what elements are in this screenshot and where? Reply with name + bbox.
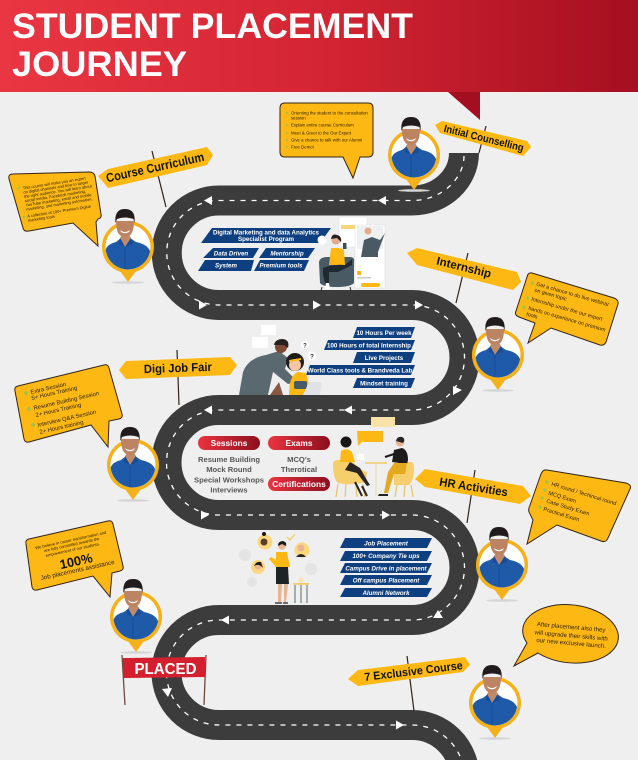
header banner: [0, 0, 638, 120]
panel: sessions and exams: [194, 436, 330, 494]
pin: counsellor, digi job fair: [107, 427, 159, 502]
speech bubble: HR activities: Case Study Exam: [545, 499, 590, 518]
speech bubble: job placements 100%: 100%: [58, 550, 94, 572]
speech bubble: course curriculum: [9, 172, 101, 246]
speech bubble: course curriculum: the right audience. You will learn about: [24, 183, 93, 199]
speech bubble: job placements 100%: empowerment of our students.: [45, 541, 100, 558]
speech bubble: exclusive course: our new exclusive launch.: [536, 637, 606, 650]
panel: internship highlights banners: 10 Hours Per week: [356, 330, 412, 337]
speech bubble: digi job fair: 2+ Hours training: [39, 420, 84, 436]
signpost: Course Curriculum: [98, 147, 213, 207]
speech bubble: course curriculum: marketing, and marketing automation.: [26, 196, 93, 212]
pin: counsellor, placed: [110, 579, 162, 654]
illustration: interview at table: [333, 417, 414, 497]
speech bubble: job placements 100%: are fully committed towards the: [43, 536, 101, 553]
illustration: recruiter with candidates: [239, 532, 317, 603]
speech bubble: course curriculum: on digital channels and how to target: [23, 179, 89, 195]
speech bubble: HR activities: Practical Exam: [542, 507, 580, 523]
speech bubble: internship: Get a chance to do live webinar: [535, 282, 610, 308]
panel: sessions and exams: Therotical: [281, 465, 317, 474]
panel: placement banners: Off campus Placement: [353, 578, 420, 584]
speech bubble: initial counselling: Give a chance to talk with our Alumni: [291, 138, 362, 142]
panel: sessions and exams: Interviews: [210, 486, 248, 494]
speech bubble: internship: hands on experience on premium: [528, 306, 607, 334]
panel: placement banners: Alumni Network: [361, 590, 410, 597]
panel: sessions and exams: Special Workshops: [194, 476, 264, 484]
speech bubble: initial counselling: Meet & Greet to the Our Expert: [291, 130, 352, 136]
panel: digital marketing program banners: Mentorship: [270, 250, 304, 258]
pin: counsellor, course curriculum: [102, 209, 154, 284]
speech bubble: digi job fair: Interview Q&A Session: [37, 410, 97, 429]
pin: counsellor, internship: [472, 317, 524, 392]
signpost: Course Curriculum: Course Curriculum: [105, 150, 205, 185]
road: [166, 153, 465, 760]
signpost: 7 Exclusive Course: [348, 656, 470, 711]
speech bubble: digi job fair: Extra Session: [30, 382, 67, 396]
signpost: Digi Job Fair: Digi Job Fair: [144, 360, 212, 376]
panel: placement banners: [340, 538, 432, 597]
illustration: person in armchair with app screens: [318, 217, 385, 291]
panel: sessions and exams: Resume Building: [198, 455, 260, 464]
speech bubble: initial counselling: Free Demo!: [291, 144, 314, 150]
panel: internship highlights banners: Live Projects: [365, 355, 404, 362]
panel: digital marketing program banners: Data Driven: [214, 250, 248, 258]
panel: placement banners: Job Placement: [364, 540, 409, 548]
speech bubble: exclusive course: will upgrade their skills with: [533, 629, 608, 643]
speech bubble: job placements 100%: We believe in career transformation and: [35, 530, 107, 550]
panel: digital marketing program banners: System: [215, 262, 238, 270]
panel: sessions and exams: Mock Round: [206, 465, 252, 474]
panel: digital marketing program banners: [198, 228, 331, 271]
panel: digital marketing program banners: Premium tools: [260, 262, 303, 270]
speech bubble: internship: on given topic: [534, 288, 568, 303]
panel: sessions and exams: Certifications: [272, 479, 326, 489]
signpost: Digi Job Fair: [119, 350, 237, 405]
panel: internship highlights banners: [306, 327, 415, 388]
speech bubble: HR activities: HR round / Techincal round: [550, 482, 617, 507]
panel: placement banners: 100+ Company Tie ups: [352, 553, 420, 560]
speech bubble: digi job fair: 2+ Hours Training: [35, 403, 82, 419]
signpost: 7 Exclusive Course: 7 Exclusive Course: [364, 660, 463, 684]
panel: digital marketing program banners: Specialist Program: [238, 236, 295, 243]
signpost: Internship: Internship: [435, 255, 492, 281]
signpost: Internship: [407, 248, 521, 303]
speech bubble: course curriculum: social media, Facebook marketing,: [24, 189, 86, 203]
speech bubble: internship: Internship under the our expert: [530, 297, 603, 323]
speech bubble: initial counselling: [280, 103, 373, 178]
panel: internship highlights banners: 100 Hours of total Internship: [327, 342, 411, 350]
speech bubble: course curriculum: A collection of 100+ Premium Digital: [27, 204, 91, 219]
panel: internship highlights banners: World Class tools & Brandveda Lab: [308, 368, 413, 374]
speech bubble: course curriculum: marketing tools: [28, 214, 55, 223]
title: [12, 7, 413, 84]
panel: placement banners: Campus Drive in placement: [345, 566, 428, 572]
speech bubble: internship: [515, 273, 618, 345]
panel: sessions and exams: Sessions: [211, 438, 248, 448]
title: STUDENT PLACEMENT: [12, 7, 413, 46]
title: JOURNEY: [12, 45, 187, 84]
panel: sessions and exams: MCQ's: [287, 455, 311, 464]
panel: internship highlights banners: Mindset training: [360, 380, 408, 388]
signpost: Initial Counselling: Initial Counselling: [442, 123, 525, 154]
speech bubble: course curriculum: This course will make you an expert: [22, 175, 87, 190]
speech bubble: HR activities: MCQ Exam: [547, 491, 577, 505]
illustration: mentor and student at laptop: ?: [303, 344, 307, 350]
road direction arrows: [162, 196, 462, 730]
speech bubble: HR activities: [527, 470, 630, 544]
panel: digital marketing program banners: Digital Marketing and data Analytics: [213, 230, 320, 236]
speech bubble: digi job fair: 5+ Hours Training: [31, 386, 78, 402]
signpost: HR Activities: [415, 469, 531, 523]
signpost: HR Activities: HR Activities: [438, 475, 509, 499]
speech bubble: job placements 100%: Job placements assistance: [40, 559, 116, 582]
speech bubble: digi job fair: Resume Building Session: [33, 391, 100, 412]
speech bubble: internship: tools: [525, 312, 538, 321]
illustration: mentor and student at laptop: [239, 325, 322, 395]
speech bubble: exclusive course: [514, 605, 618, 666]
pin: counsellor, initial counselling: [388, 117, 440, 192]
illustration: mentor and student at laptop: ?: [310, 354, 314, 360]
speech bubble: exclusive course: After placement also they: [537, 621, 607, 634]
banner: placed finish line: PLACED: [134, 661, 196, 678]
panel: sessions and exams: Exams: [285, 438, 313, 448]
speech bubble: initial counselling: Explain entire course Curriculum: [291, 122, 354, 128]
speech bubble: initial counselling: session: [291, 116, 306, 120]
speech bubble: digi job fair: [15, 365, 122, 447]
pin: counsellor, exclusive course: [469, 665, 521, 740]
banner: placed finish line: [122, 655, 206, 705]
speech bubble: course curriculum: YouTube marketing, email and mobile: [25, 192, 93, 207]
speech bubble: job placements 100%: [26, 521, 123, 597]
pin: counsellor, HR activities: [476, 527, 528, 602]
speech bubble: initial counselling: Orienting the student to the consultation: [291, 110, 368, 116]
